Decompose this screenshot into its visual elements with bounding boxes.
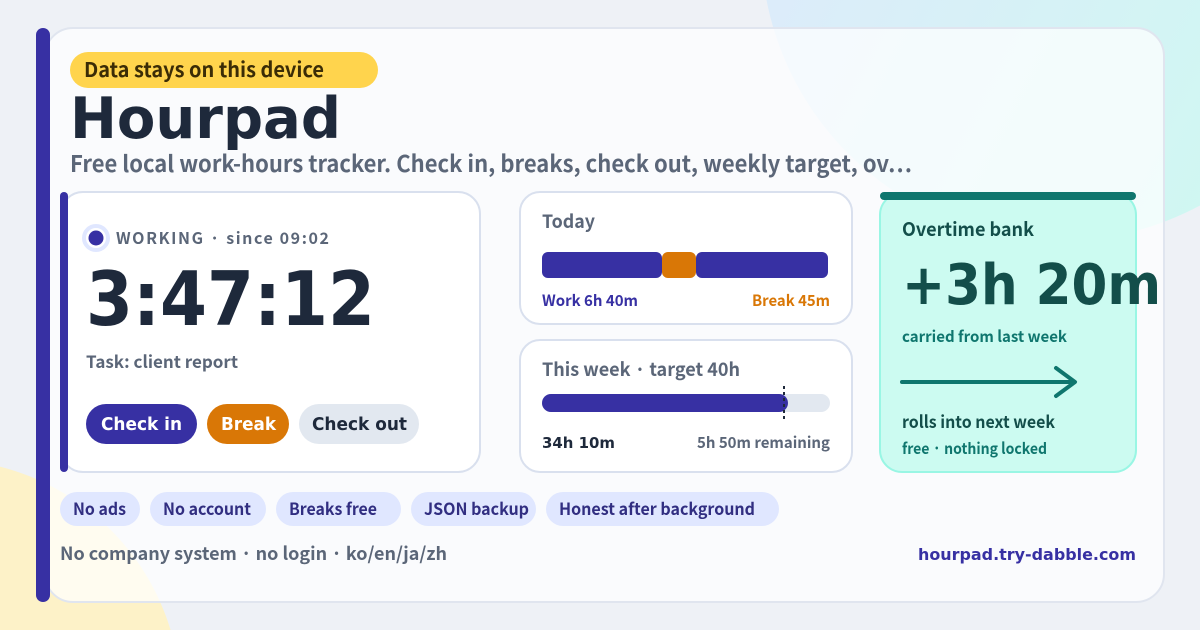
chip: breaks free: Breaks free bbox=[289, 496, 377, 520]
arrow bbox=[902, 368, 1075, 396]
button: break bbox=[207, 404, 289, 444]
carried label: carried from last week bbox=[902, 325, 1068, 347]
work label: Work 6h 40m bbox=[542, 289, 638, 311]
subtitle: Free local work-hours tracker. Check in, breaks, check out, weekly target, ov… bbox=[70, 145, 912, 179]
button: check out: Check out bbox=[312, 414, 407, 435]
rolls label: rolls into next week bbox=[902, 408, 1056, 433]
week progress bar bbox=[542, 386, 830, 420]
chip: no ads bbox=[60, 492, 140, 526]
chip: no account bbox=[150, 492, 266, 526]
button: break: Break bbox=[221, 414, 277, 435]
site url: hourpad.try-dabble.com bbox=[918, 545, 1136, 564]
hours remaining: 5h 50m remaining bbox=[697, 431, 830, 453]
panel accent bar bbox=[60, 192, 68, 472]
chip: honest after background: Honest after background bbox=[559, 496, 755, 520]
today timeline bar bbox=[542, 252, 828, 278]
badge: data stays on this device bbox=[70, 52, 378, 88]
task label: Task: client report bbox=[86, 348, 238, 373]
break label: Break 45m bbox=[752, 289, 830, 311]
overtime heading: Overtime bank bbox=[902, 215, 1034, 242]
timer value: 3:47:12 bbox=[86, 255, 375, 343]
feature chips bbox=[60, 492, 779, 526]
left accent bar bbox=[36, 28, 50, 602]
top accent bar bbox=[880, 192, 1136, 200]
hours worked: 34h 10m bbox=[542, 434, 615, 452]
chip: no ads: No ads bbox=[73, 496, 126, 520]
chip: breaks free bbox=[276, 492, 401, 526]
chip: no account: No account bbox=[163, 496, 251, 520]
panel: overtime bank bbox=[880, 192, 1161, 472]
title: Hourpad bbox=[70, 86, 341, 152]
button: check in: Check in bbox=[101, 414, 182, 435]
footer note: No company system · no login · ko/en/ja/zh bbox=[60, 540, 447, 566]
status text: WORKING · since 09:02 bbox=[116, 225, 329, 249]
badge: data stays on this device: Data stays on this device bbox=[84, 53, 324, 83]
status indicator bbox=[84, 226, 108, 250]
chip: json backup bbox=[411, 492, 536, 526]
button: check out bbox=[299, 404, 419, 444]
button: check in bbox=[86, 404, 197, 444]
chip: json backup: JSON backup bbox=[424, 496, 529, 520]
overtime value: +3h 20m bbox=[902, 253, 1161, 318]
week heading: This week · target 40h bbox=[542, 356, 740, 382]
panel: this week bbox=[520, 340, 852, 472]
panel: today bbox=[520, 192, 852, 324]
panel: timer bbox=[60, 192, 480, 472]
today heading: Today bbox=[542, 208, 595, 234]
chip: honest after background bbox=[546, 492, 779, 526]
free label: free · nothing locked bbox=[902, 437, 1047, 459]
